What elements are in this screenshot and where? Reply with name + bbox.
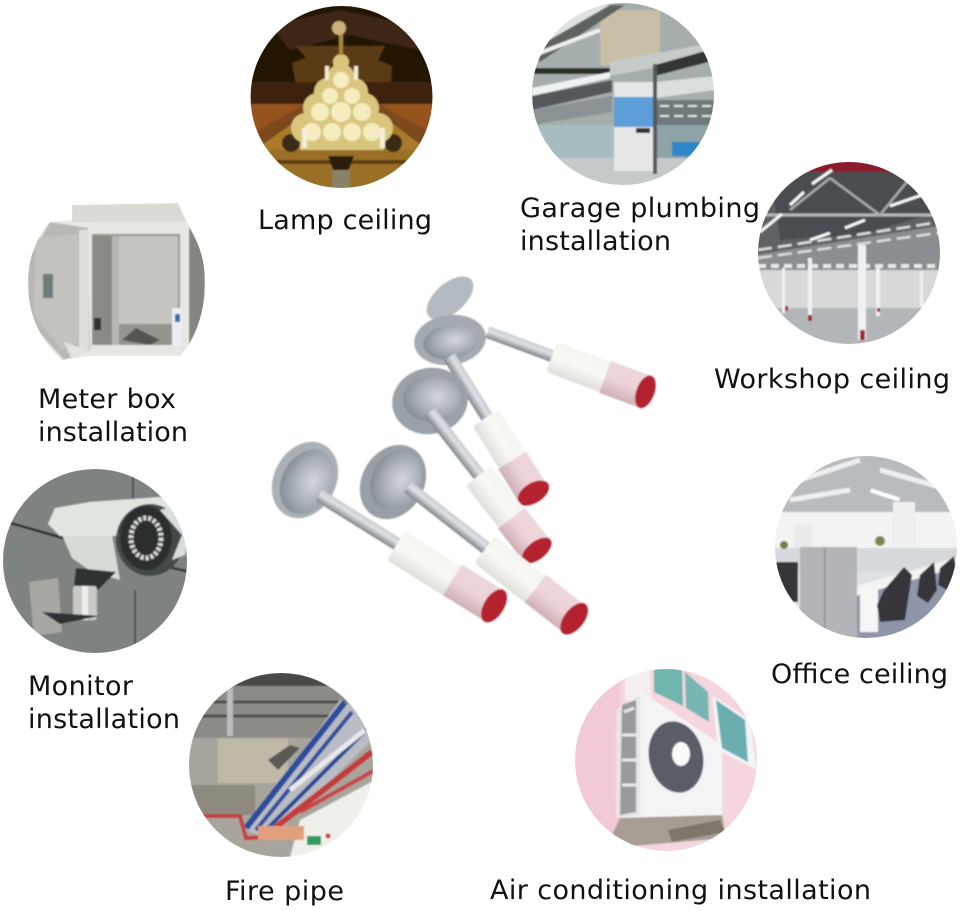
label: garage plumbing installation: installation bbox=[520, 226, 671, 257]
label: monitor installation: Monitor bbox=[28, 671, 134, 702]
label: air conditioning installation: Air conditioning installation bbox=[490, 875, 871, 906]
label: lamp ceiling: Lamp ceiling bbox=[258, 205, 432, 236]
pin 2 bbox=[411, 310, 553, 511]
label: meter box installation: installation bbox=[38, 417, 188, 448]
photo: meter box bbox=[28, 203, 205, 360]
pin 4 (front) bbox=[259, 430, 512, 627]
label: workshop ceiling: Workshop ceiling bbox=[714, 364, 950, 395]
label: meter box installation: Meter box bbox=[38, 384, 176, 415]
label: office ceiling: Office ceiling bbox=[771, 659, 948, 690]
label: garage plumbing installation bbox=[520, 193, 760, 257]
pin 5 bbox=[347, 433, 593, 639]
label: garage plumbing installation: Garage plumbing bbox=[520, 193, 760, 224]
label: monitor installation: installation bbox=[28, 704, 180, 735]
photo: workshop ceiling bbox=[755, 160, 945, 350]
photo: lamp ceiling chandelier bbox=[250, 5, 434, 190]
pin 3 bbox=[386, 361, 556, 568]
photo: office ceiling bbox=[770, 452, 960, 644]
photo: fire pipes bbox=[185, 670, 377, 862]
label: monitor installation bbox=[28, 671, 180, 735]
label: fire pipe: Fire pipe bbox=[225, 876, 344, 907]
photo: security camera on wall bbox=[0, 465, 190, 657]
label: meter box installation bbox=[38, 384, 188, 448]
product photo: five fastener pins bbox=[259, 268, 660, 639]
pin 1 (rear) bbox=[419, 268, 660, 411]
photo: air conditioner unit bbox=[570, 665, 762, 855]
photo: garage plumbing bbox=[530, 0, 718, 190]
